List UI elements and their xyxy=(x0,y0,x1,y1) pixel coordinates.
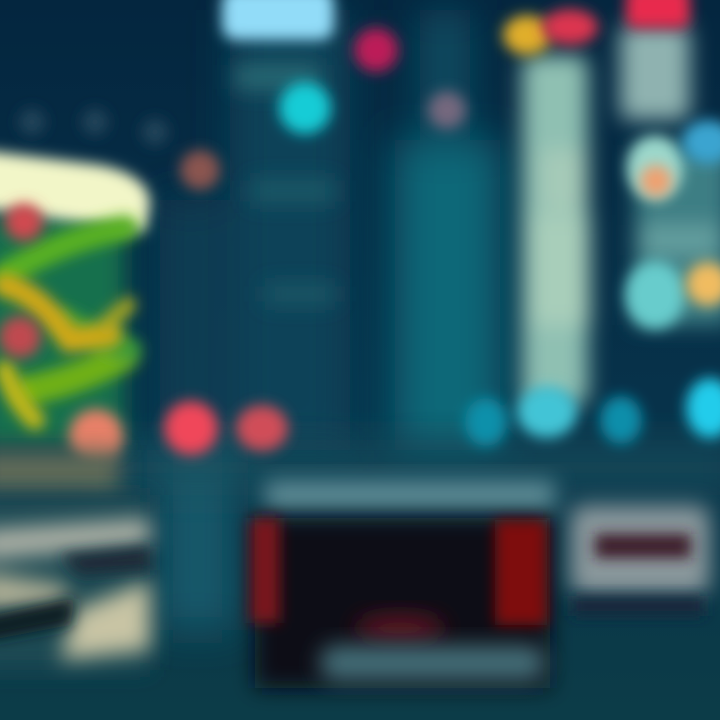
dark road stripes xyxy=(0,546,150,642)
light: red traffic lights xyxy=(164,401,288,455)
bright pale tower xyxy=(522,55,590,405)
light: faint red dots xyxy=(19,109,220,190)
billboard lower strip xyxy=(0,450,120,495)
light: red right tower top xyxy=(626,0,690,28)
car bumper xyxy=(320,645,545,681)
car red left side xyxy=(250,518,280,623)
light: cyan sign xyxy=(279,82,331,134)
billboard red dots xyxy=(0,203,123,463)
right car body xyxy=(570,505,710,595)
right building xyxy=(635,145,720,325)
light: top blue glow xyxy=(222,0,334,40)
central car xyxy=(250,480,555,688)
pale road stripes xyxy=(0,518,150,660)
car body dark xyxy=(255,518,550,688)
light: blue glow right xyxy=(682,120,720,164)
light: muted pink sign xyxy=(428,91,466,129)
left road markings xyxy=(0,495,150,670)
light: cyan glow right xyxy=(625,261,685,329)
right car xyxy=(570,505,710,616)
right tower xyxy=(620,25,690,120)
billboard xyxy=(0,150,150,495)
light: cyan street glows xyxy=(465,378,720,446)
billboard body xyxy=(0,215,125,445)
light: yellow tower top xyxy=(503,15,551,55)
right car red band xyxy=(595,534,691,558)
light: orange dot right xyxy=(640,165,672,197)
light: red tower top xyxy=(542,9,598,45)
building window bands xyxy=(235,65,335,303)
car red right side xyxy=(495,520,547,625)
lights: skyline signs xyxy=(19,0,720,455)
billboard green strokes xyxy=(5,228,130,390)
right car shadow xyxy=(572,596,704,616)
central teal tower xyxy=(395,10,500,450)
light: pale glow right xyxy=(627,136,683,200)
light: magenta sign xyxy=(354,28,398,72)
left-centre building xyxy=(160,10,350,630)
car interior red xyxy=(355,614,445,642)
billboard yellow strokes xyxy=(5,285,128,420)
street haze xyxy=(100,440,720,495)
car roof haze xyxy=(265,480,555,512)
billboard top light xyxy=(0,150,150,232)
light: amber sign right xyxy=(686,262,720,306)
